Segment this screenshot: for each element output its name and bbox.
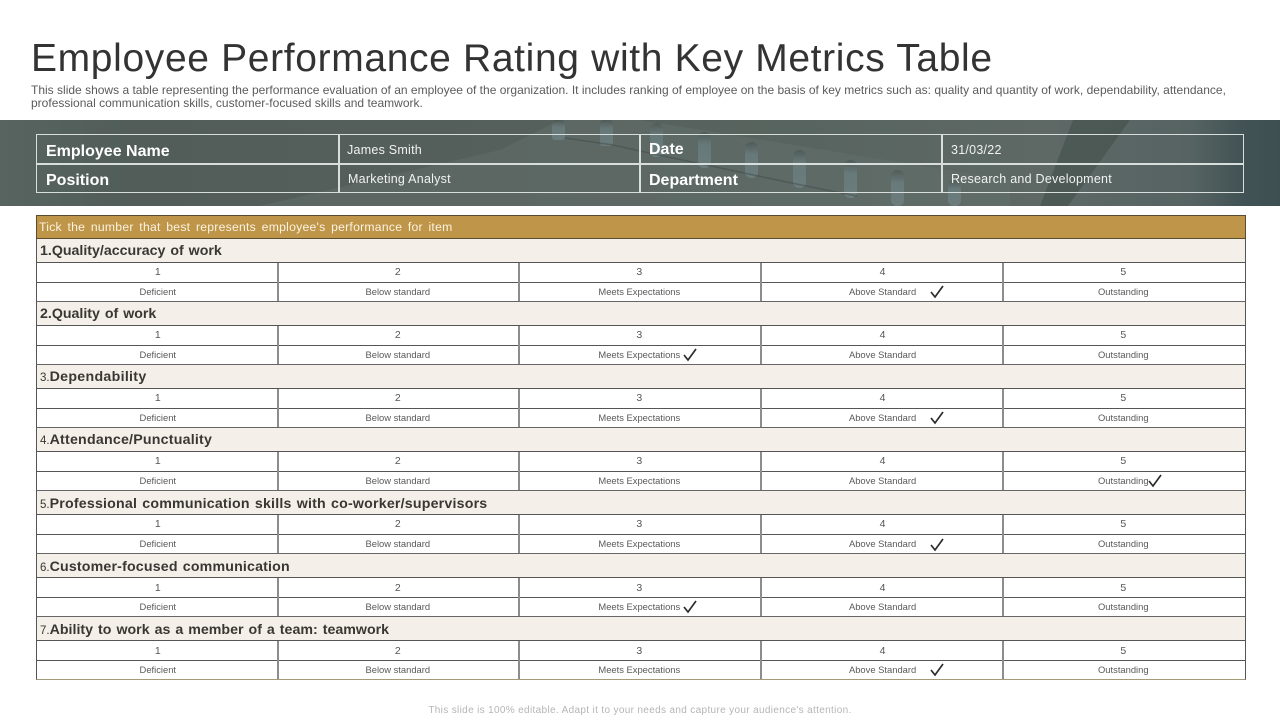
field: department value: Research and Development <box>951 172 1112 186</box>
section 5: professional communication skills: Deficient <box>140 538 176 549</box>
section 5: professional communication skills <box>36 491 1246 554</box>
section 5: professional communication skills: 3 <box>636 518 642 530</box>
tick: meets expectations <box>683 600 697 614</box>
field: employee name value: James Smith <box>347 143 422 157</box>
section 3: dependability: Outstanding <box>1098 412 1149 423</box>
section 2: quality of work: 4 <box>880 329 886 341</box>
tick: above standard <box>930 412 944 424</box>
section 1: quality/accuracy of work: 5 <box>1120 266 1126 278</box>
section 4: attendance/punctuality: 1 <box>155 455 161 467</box>
section 7: teamwork: 2 <box>395 645 401 657</box>
tick: outstanding <box>1148 474 1162 488</box>
section 2: quality of work: 5 <box>1120 329 1126 341</box>
section 2: quality of work: Outstanding <box>1098 349 1149 360</box>
section 5: professional communication skills: 4 <box>880 518 886 530</box>
section 4: attendance/punctuality: 5 <box>1120 455 1126 467</box>
section 4: attendance/punctuality: 3 <box>636 455 642 467</box>
section 4: attendance/punctuality: Outstanding <box>1098 475 1149 486</box>
section 7: teamwork: Deficient <box>140 664 176 675</box>
section 5: professional communication skills: 5 <box>1120 518 1126 530</box>
tick: above standard <box>930 664 944 676</box>
section 6: customer-focused communication: Above Standard <box>849 601 916 612</box>
section 1: quality/accuracy of work: 1.Quality/accuracy of work <box>40 243 222 259</box>
section 3: dependability: Meets Expectations <box>598 412 680 423</box>
section 7: teamwork <box>36 617 1246 680</box>
section 1: quality/accuracy of work: Below standard <box>365 286 430 297</box>
section 6: customer-focused communication: Meets Expectations <box>598 601 680 612</box>
section 3: dependability: Deficient <box>140 412 176 423</box>
tick: above standard <box>930 286 944 298</box>
section 6: customer-focused communication: 1 <box>155 582 161 594</box>
section 3: dependability: 4 <box>880 392 886 404</box>
section 2: quality of work: 2 <box>395 329 401 341</box>
section 1: quality/accuracy of work <box>36 239 1246 302</box>
field: position label: Position <box>46 172 109 189</box>
section 1: quality/accuracy of work: Above Standard <box>849 286 916 297</box>
section 3: dependability: 5 <box>1120 392 1126 404</box>
section 3: dependability <box>36 365 1246 428</box>
section 3: dependability: 1 <box>155 392 161 404</box>
description text: professional communication skills, customer-focused skills and teamwork. <box>31 96 423 110</box>
field: date label: Date <box>649 141 684 158</box>
section 7: teamwork: Below standard <box>365 664 430 675</box>
field: department label: Department <box>649 172 738 189</box>
field: date value: 31/03/22 <box>951 143 1002 157</box>
section 2: quality of work: Below standard <box>365 349 430 360</box>
section 1: quality/accuracy of work: Meets Expectations <box>598 286 680 297</box>
section 5: professional communication skills: Outstanding <box>1098 538 1149 549</box>
field: employee name label: Employee Name <box>46 143 170 160</box>
description text: This slide shows a table representing the performance evaluation of an employee of the organization. It includes ranking of employee on the basis of key metrics such as: quality and quantity of work, dependability, attendance, <box>31 83 1226 97</box>
section 4: attendance/punctuality: Above Standard <box>849 475 916 486</box>
section 2: quality of work: 3 <box>636 329 642 341</box>
section 6: customer-focused communication: 6.Customer-focused communication <box>40 559 290 575</box>
section 7: teamwork: Outstanding <box>1098 664 1149 675</box>
table instruction header: Tick the number that best represents employee's performance for item <box>39 220 453 234</box>
performance rating table <box>36 215 1246 680</box>
section 6: customer-focused communication: 5 <box>1120 582 1126 594</box>
section 2: quality of work: Above Standard <box>849 349 916 360</box>
section 1: quality/accuracy of work: 4 <box>880 266 886 278</box>
section 3: dependability: 3.Dependability <box>40 369 147 385</box>
table instruction header <box>36 215 1246 239</box>
section 6: customer-focused communication: 3 <box>636 582 642 594</box>
section 6: customer-focused communication: 2 <box>395 582 401 594</box>
section 6: customer-focused communication: Below standard <box>365 601 430 612</box>
section 7: teamwork: Above Standard <box>849 664 916 675</box>
tick: meets expectations <box>683 348 697 362</box>
section 1: quality/accuracy of work: 3 <box>636 266 642 278</box>
section 7: teamwork: 7.Ability to work as a member of a team: teamwork <box>40 622 389 638</box>
section 3: dependability: Below standard <box>365 412 430 423</box>
section 4: attendance/punctuality: Meets Expectations <box>598 475 680 486</box>
section 5: professional communication skills: 1 <box>155 518 161 530</box>
section 7: teamwork: 1 <box>155 645 161 657</box>
section 4: attendance/punctuality <box>36 428 1246 491</box>
section 4: attendance/punctuality: 2 <box>395 455 401 467</box>
section 6: customer-focused communication: Outstanding <box>1098 601 1149 612</box>
section 5: professional communication skills: 2 <box>395 518 401 530</box>
section 5: professional communication skills: 5.Professional communication skills with co-worker/supervisors <box>40 496 487 512</box>
section 4: attendance/punctuality: 4.Attendance/Punctuality <box>40 432 212 448</box>
section 2: quality of work: 2.Quality of work <box>40 306 156 322</box>
section 4: attendance/punctuality: 4 <box>880 455 886 467</box>
section 5: professional communication skills: Above Standard <box>849 538 916 549</box>
section 6: customer-focused communication: Deficient <box>140 601 176 612</box>
section 5: professional communication skills: Meets Expectations <box>598 538 680 549</box>
section 2: quality of work: 1 <box>155 329 161 341</box>
section 3: dependability: 2 <box>395 392 401 404</box>
section 6: customer-focused communication <box>36 554 1246 617</box>
photo band: notebook spiral background <box>0 120 1280 206</box>
section 3: dependability: Above Standard <box>849 412 916 423</box>
section 2: quality of work: Meets Expectations <box>598 349 680 360</box>
description text <box>31 83 1226 110</box>
section 4: attendance/punctuality: Below standard <box>365 475 430 486</box>
footer note: This slide is 100% editable. Adapt it to your needs and capture your audience's attention. <box>428 705 852 716</box>
section 2: quality of work <box>36 302 1246 365</box>
section 7: teamwork: 5 <box>1120 645 1126 657</box>
section 2: quality of work: Deficient <box>140 349 176 360</box>
section 3: dependability: 3 <box>636 392 642 404</box>
field: position value: Marketing Analyst <box>348 172 451 186</box>
section 7: teamwork: Meets Expectations <box>598 664 680 675</box>
section 1: quality/accuracy of work: 2 <box>395 266 401 278</box>
employee information table <box>36 134 1244 193</box>
section 7: teamwork: 4 <box>880 645 886 657</box>
section 1: quality/accuracy of work: 1 <box>155 266 161 278</box>
section 1: quality/accuracy of work: Outstanding <box>1098 286 1149 297</box>
section 4: attendance/punctuality: Deficient <box>140 475 176 486</box>
section 7: teamwork: 3 <box>636 645 642 657</box>
title: Employee Performance Rating with Key Metrics Table <box>31 37 993 80</box>
tick: above standard <box>930 538 944 552</box>
section 5: professional communication skills: Below standard <box>365 538 430 549</box>
section 1: quality/accuracy of work: Deficient <box>140 286 176 297</box>
section 6: customer-focused communication: 4 <box>880 582 886 594</box>
